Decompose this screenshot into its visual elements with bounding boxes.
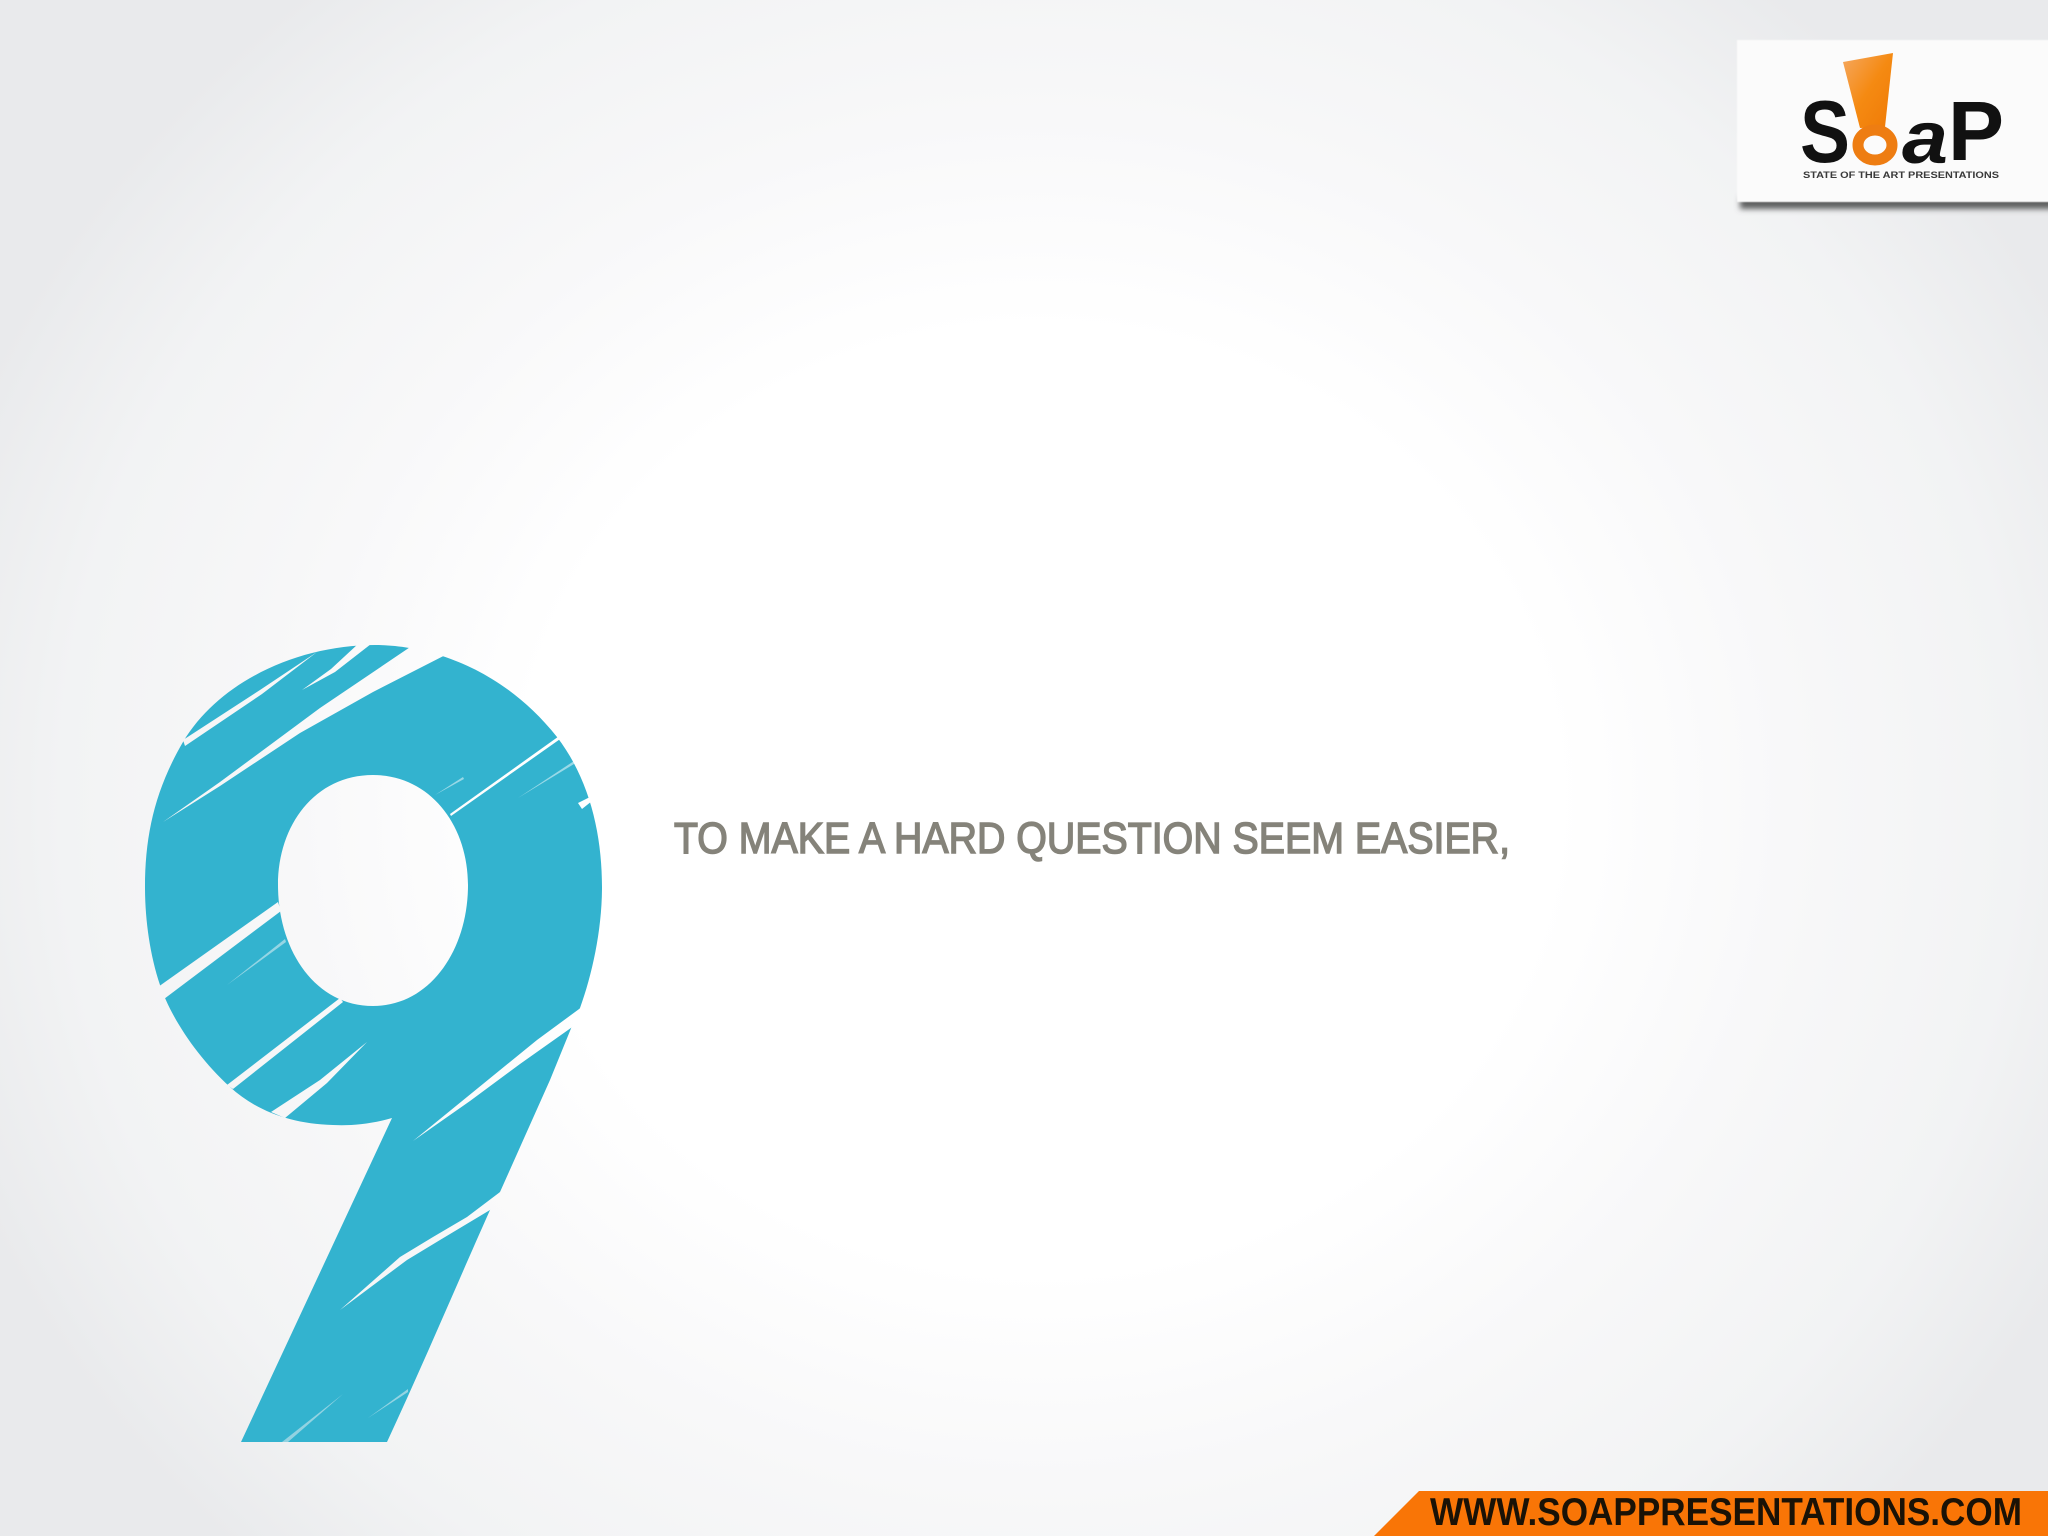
card shadow — [1740, 197, 2048, 209]
numeral nine — [145, 645, 602, 1442]
orange band — [1374, 1491, 2048, 1536]
icon: orange exclamation mark — [1843, 53, 1893, 128]
headline text: TO MAKE A HARD QUESTION SEEM EASIER, — [674, 814, 1510, 863]
logo letter S: S — [1800, 82, 1850, 181]
logo tagline: STATE OF THE ART PRESENTATIONS — [1803, 170, 1999, 181]
icon: orange ring letter o — [1858, 130, 1892, 160]
logo letter P: P — [1948, 84, 2004, 178]
logo letter a: a — [1902, 96, 1948, 179]
footer banner — [1374, 1491, 2048, 1536]
card panel — [1737, 40, 2048, 202]
logo card — [1737, 40, 2048, 209]
